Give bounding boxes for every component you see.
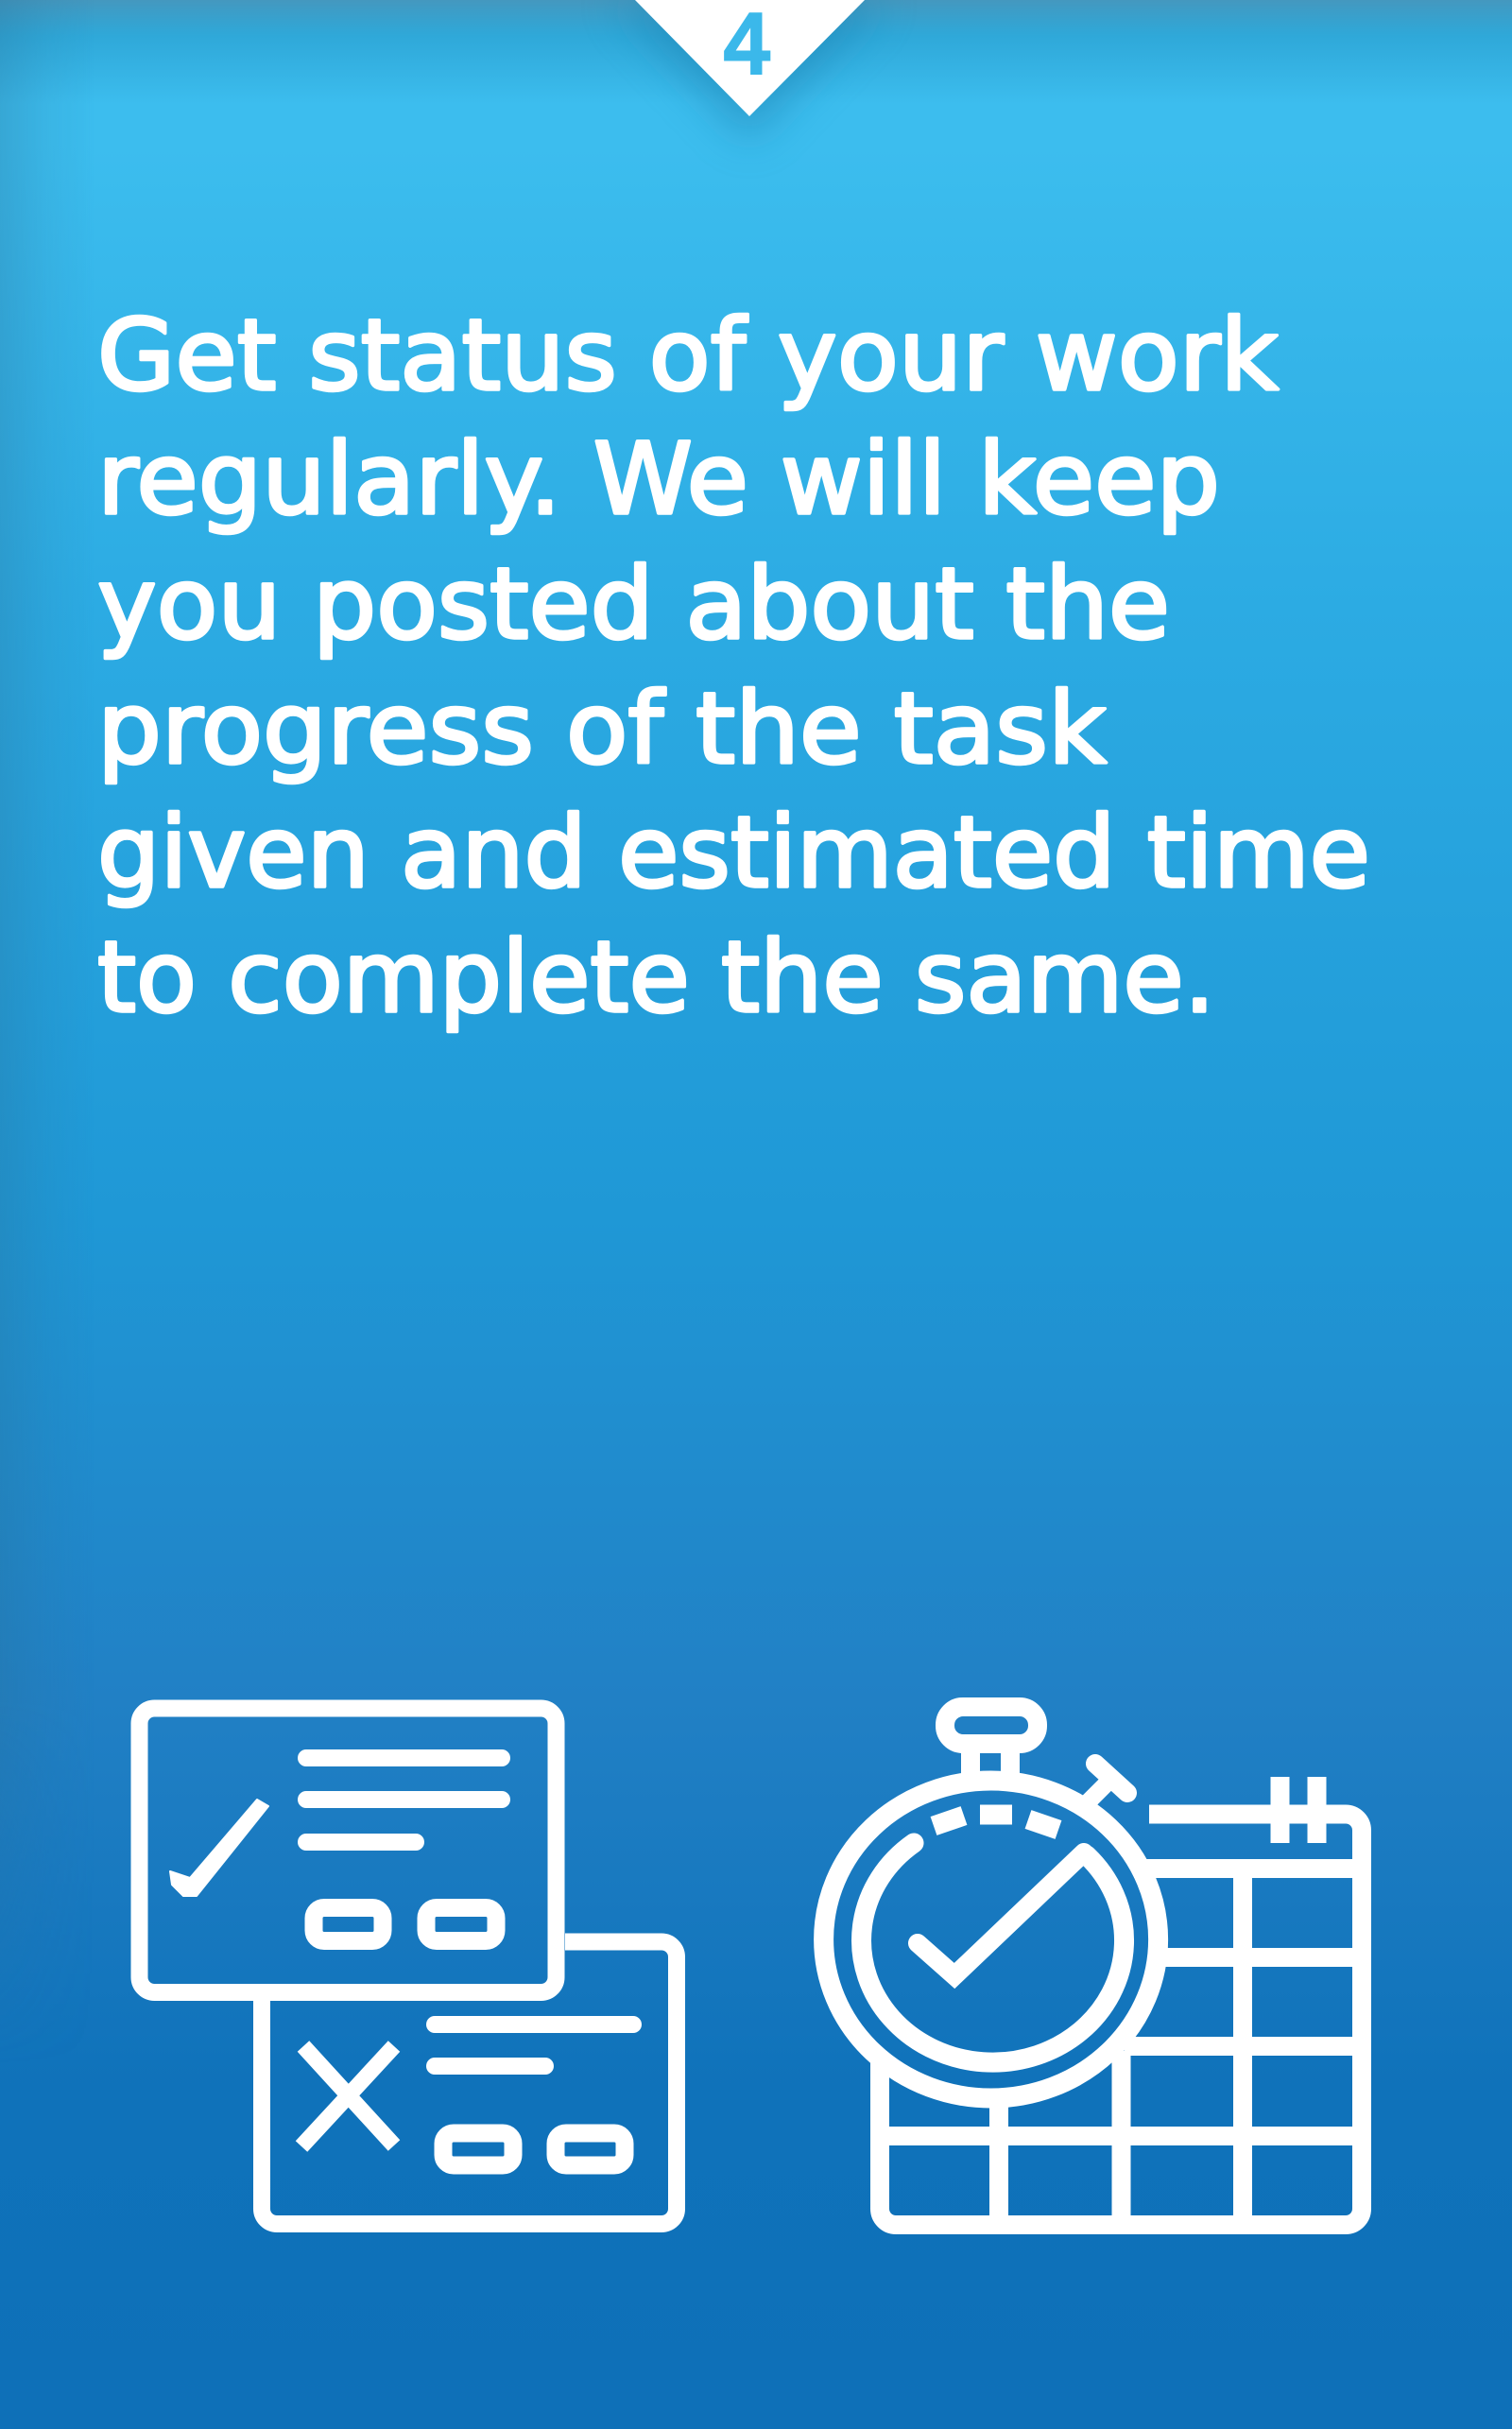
text block: description: to complete the same. — [97, 920, 1215, 1035]
text block: description: given and estimated time — [97, 795, 1370, 910]
icon: stopwatch and calendar — [824, 1707, 1362, 2225]
icon: accept and reject cards — [140, 1709, 677, 2224]
text block: description: regularly. We will keep — [97, 422, 1220, 537]
stopwatch — [824, 1707, 1159, 2098]
text block: description: you posted about the — [97, 546, 1170, 662]
card: approved — [140, 1709, 556, 1992]
number badge: step 4: 4 — [722, 0, 773, 93]
calendar — [880, 1777, 1362, 2225]
text block: description: Get status of your work — [97, 298, 1279, 413]
card: rejected — [262, 1941, 677, 2224]
text block: description — [97, 298, 1370, 1035]
number badge: step 4 — [614, 0, 884, 142]
text block: description: progress of the task — [97, 671, 1107, 786]
